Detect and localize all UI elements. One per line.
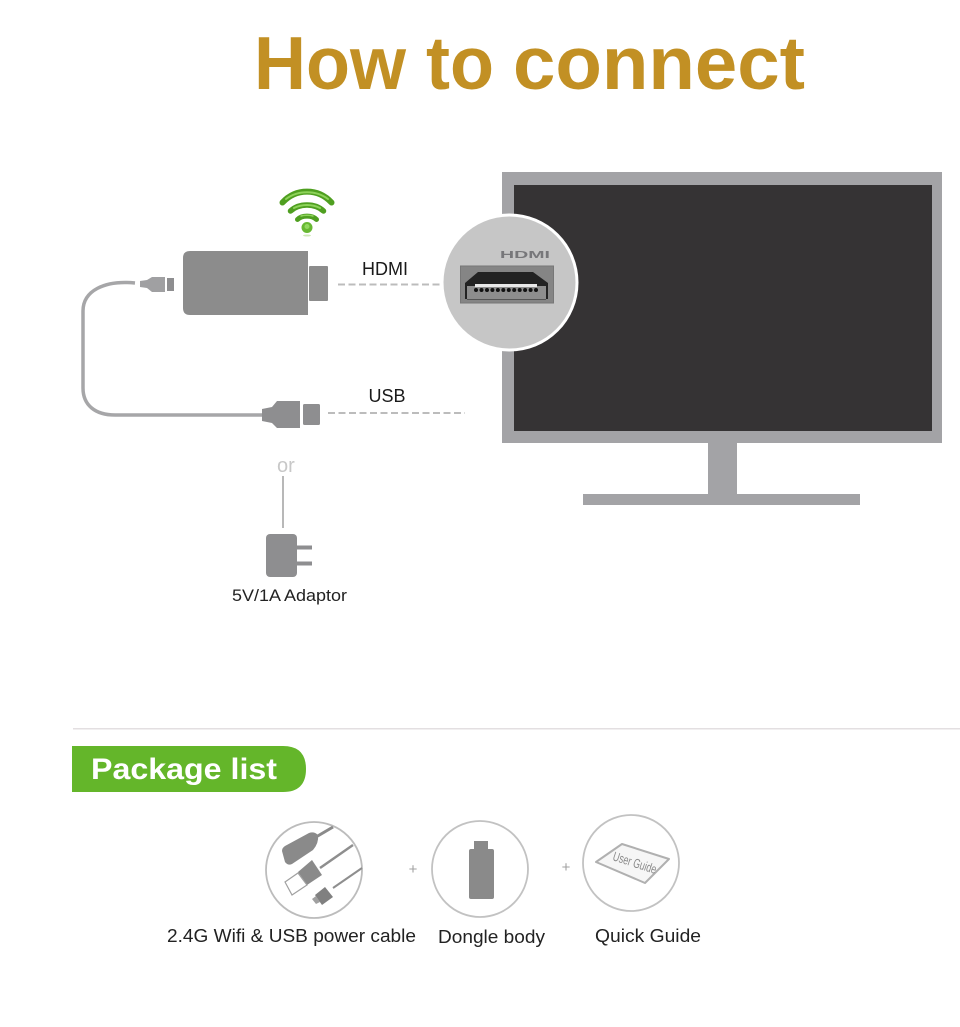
- TV monitor: [502, 172, 942, 505]
- USB label: USB: [368, 386, 406, 406]
- cable caption: 2.4G Wifi & USB power cable: [167, 926, 416, 946]
- title: connect: [513, 21, 805, 105]
- adaptor label: 5V/1A Adaptor: [232, 586, 347, 605]
- icon: dongle item: [432, 821, 528, 917]
- plus sign: +: [409, 861, 418, 878]
- title: How: [254, 21, 407, 105]
- icon: dongle: [183, 251, 328, 315]
- or connector line: [282, 476, 284, 528]
- icon: quick guide item: [583, 815, 679, 911]
- icon: quick guide item: User Guide: [611, 849, 659, 877]
- HDMI port callout: [440, 214, 578, 352]
- icon: cable item: [266, 822, 362, 918]
- HDMI label: HDMI: [362, 259, 408, 279]
- HDMI port callout: HDMI: [500, 250, 550, 261]
- or label: or: [277, 455, 295, 477]
- divider: [73, 728, 960, 730]
- USB connection line: [328, 412, 465, 414]
- title: to: [426, 21, 494, 105]
- icon: wifi signal: [282, 192, 332, 236]
- USB power cable: [83, 277, 320, 428]
- guide caption: Quick Guide: [595, 926, 701, 946]
- title: [254, 21, 805, 105]
- icon: power adaptor: [266, 534, 312, 577]
- HDMI connection line: [338, 284, 440, 286]
- package list heading: [72, 746, 306, 792]
- plus sign: +: [562, 859, 571, 876]
- package list heading: Package list: [91, 753, 277, 786]
- dongle caption: Dongle body: [438, 927, 545, 947]
